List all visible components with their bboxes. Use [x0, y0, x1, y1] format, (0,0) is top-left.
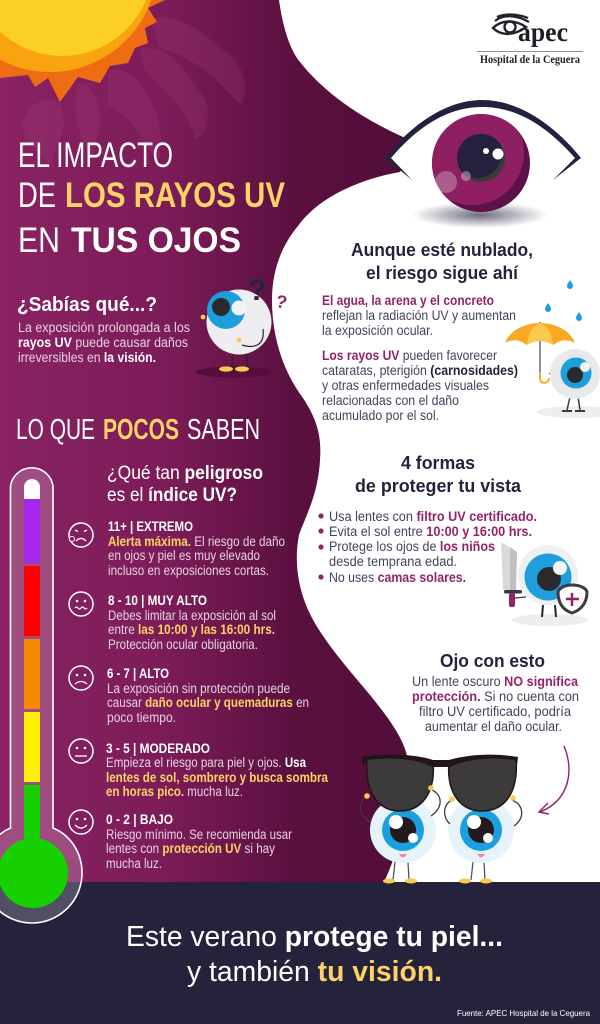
heading: índice UV: es el índice UV?: [107, 485, 237, 506]
title: DE: [18, 176, 56, 215]
UV level: alto: poco tiempo.: [107, 710, 176, 725]
text block: ojo con esto: Un lente oscuro NO significa: [412, 674, 578, 689]
text block: 4 formas: desde temprana edad.: [329, 554, 457, 569]
text block: aunque esté nublado: El agua, la arena y el concreto: [322, 293, 494, 308]
decorative sun rays: [22, 18, 245, 165]
text block: aunque esté nublado: Aunque esté nublado,: [351, 240, 533, 260]
text block: sabías qué: rayos UV puede causar daños: [18, 335, 188, 350]
UV level: bajo: [69, 810, 292, 871]
UV level: bajo: 0 - 2 | BAJO: [106, 812, 173, 827]
heading: lo que pocos saben: SABEN: [187, 414, 260, 446]
title: LOS RAYOS UV: [65, 176, 286, 215]
UV level: extremo: en ojos y piel es muy elevado: [108, 548, 260, 563]
icon: two eye mascots with sunglasses: [361, 755, 522, 884]
text block: sabías qué: La exposición prolongada a los: [18, 320, 190, 335]
UV level: muy alto: 8 - 10 | MUY ALTO: [108, 593, 207, 608]
heading: índice UV: [107, 463, 263, 506]
footer band: [0, 882, 600, 1024]
UV level: muy alto: entre las 10:00 y las 16:00 hrs.: [108, 622, 275, 637]
UV level: muy alto: [69, 592, 276, 652]
text block: 4 formas: Usa lentes con filtro UV certificado.: [329, 509, 537, 524]
UV level: bajo: lentes con protección UV si hay: [106, 841, 275, 856]
text block: ojo con esto: Ojo con esto: [440, 651, 545, 671]
source note: Fuente: APEC Hospital de la Ceguera: [457, 1008, 590, 1018]
heading: índice UV: ¿Qué tan peligroso: [107, 463, 263, 484]
UV level: moderado: en horas pico. mucha luz.: [106, 784, 243, 799]
text block: 4 formas: 4 formas: [401, 453, 475, 473]
title: TUS OJOS: [71, 221, 241, 260]
footer closing message: Este verano protege tu piel...: [126, 921, 503, 953]
icon: curious eye mascot: ?: [248, 274, 266, 307]
UV level: extremo: 11+ | EXTREMO: [108, 519, 193, 534]
icon: large eye: [385, 100, 581, 228]
logo: APEC Hospital de la Ceguera: Hospital de la Ceguera: [480, 54, 580, 66]
UV level: muy alto: Protección ocular obligatoria.: [108, 637, 258, 652]
icon: sun: [0, 0, 165, 102]
UV level: moderado: 3 - 5 | MODERADO: [106, 741, 210, 756]
icon: curious eye mascot: ?: [274, 291, 289, 313]
footer closing message: [126, 921, 503, 988]
text block: aunque esté nublado: la exposición ocular.: [322, 323, 433, 338]
UV level: alto: La exposición sin protección puede: [107, 681, 290, 696]
UV level: moderado: lentes de sol, sombrero y busca sombra: [106, 770, 328, 785]
text block: 4 formas: [318, 453, 537, 585]
UV level: muy alto: Debes limitar la exposición al sol: [108, 608, 276, 623]
heading: lo que pocos saben: [16, 414, 260, 446]
heading: lo que pocos saben: LO QUE: [16, 414, 95, 446]
text block: sabías qué: irreversibles en la visión.: [18, 350, 156, 365]
text block: aunque esté nublado: relacionadas con el daño: [322, 393, 459, 408]
text block: 4 formas: No uses camas solares.: [329, 570, 466, 585]
text block: sabías qué: ¿Sabías qué...?: [17, 294, 157, 316]
UV level: extremo: [69, 519, 285, 578]
text block: aunque esté nublado: reflejan la radiación UV y aumentan: [322, 308, 516, 323]
text block: ojo con esto: [412, 651, 579, 734]
UV level: bajo: Riesgo mínimo. Se recomienda usar: [106, 827, 292, 842]
heading: lo que pocos saben: POCOS: [103, 414, 179, 446]
text block: aunque esté nublado: Los rayos UV pueden favorecer: [322, 348, 497, 363]
icon: umbrella eye mascot: [505, 280, 600, 418]
text block: aunque esté nublado: y otras enfermedades visuales: [322, 378, 489, 393]
text block: ojo con esto: aumentar el daño ocular.: [425, 719, 562, 734]
UV level: alto: causar daño ocular y quemaduras en: [107, 695, 309, 710]
logo: APEC Hospital de la Ceguera: [477, 14, 583, 66]
UV level: extremo: incluso en exposiciones cortas.: [108, 563, 269, 578]
text block: 4 formas: Protege los ojos de los niños: [329, 539, 495, 554]
icon: curious eye mascot: [196, 274, 289, 378]
text block: sabías qué: [17, 294, 190, 365]
text block: 4 formas: Evita el sol entre 10:00 y 16:00 hrs.: [329, 524, 532, 539]
background: purple wave panel: [0, 0, 410, 884]
icon: shield and sword eye mascot: [501, 542, 588, 626]
UV level: moderado: Empieza el riesgo para piel y ojos. Usa: [106, 755, 306, 770]
UV level: alto: [69, 666, 309, 725]
text block: aunque esté nublado: el riesgo sigue ahí: [366, 263, 519, 283]
title: [18, 136, 286, 260]
text block: aunque esté nublado: [322, 240, 533, 423]
UV level: alto: 6 - 7 | ALTO: [107, 666, 169, 681]
text block: 4 formas: de proteger tu vista: [355, 476, 522, 496]
title: EN: [18, 221, 60, 260]
text block: ojo con esto: filtro UV certificado, podría: [419, 704, 571, 719]
text block: ojo con esto: protección. Si no cuenta con: [412, 689, 579, 704]
text block: aunque esté nublado: acumulado por el sol.: [322, 408, 439, 423]
chart: UV thermometer: [0, 468, 82, 923]
logo: APEC Hospital de la Ceguera: apec: [518, 17, 568, 47]
UV level: extremo: Alerta máxima. El riesgo de daño: [108, 534, 285, 549]
footer closing message: y también tu visión.: [187, 956, 442, 988]
text block: aunque esté nublado: cataratas, pterigión (carnosidades): [322, 363, 518, 378]
arrow: [539, 746, 569, 814]
UV level: bajo: mucha luz.: [106, 856, 162, 871]
title: EL IMPACTO: [18, 136, 173, 175]
UV level: moderado: [69, 739, 328, 799]
